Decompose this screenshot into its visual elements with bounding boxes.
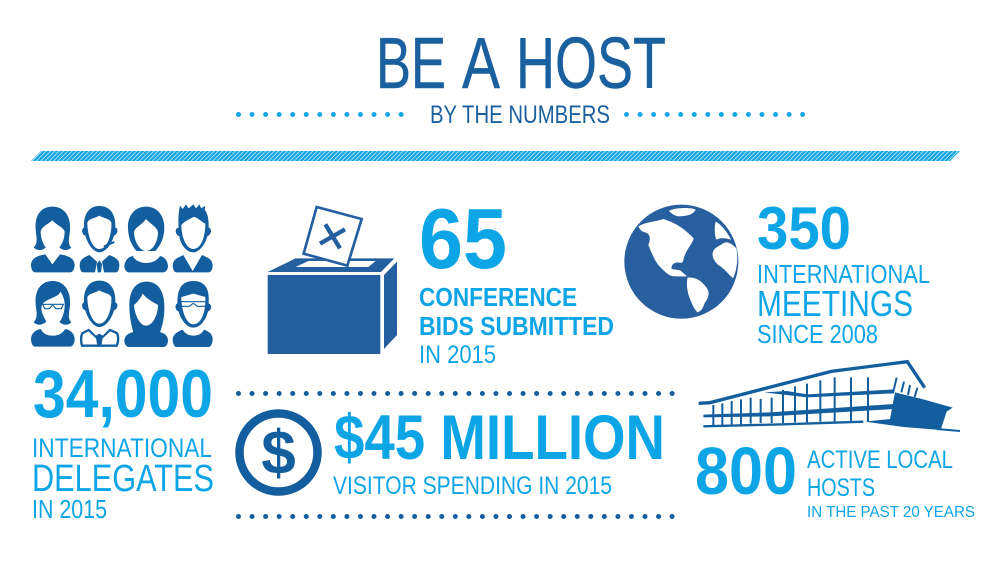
- number 34,000: 34,000: [33, 356, 213, 432]
- greenland: [669, 208, 696, 216]
- stat: visitor spending: [333, 403, 665, 500]
- slot: [296, 261, 376, 267]
- stat: 800 local hosts: [695, 434, 975, 521]
- title: HOST: [516, 24, 666, 104]
- ballot paper: [304, 207, 362, 266]
- person 2 with headset: [80, 206, 119, 272]
- label: VISITOR SPENDING IN 2015: [333, 472, 612, 500]
- globe disc: [624, 205, 738, 319]
- europe: [715, 222, 731, 240]
- icon: convention building: [699, 362, 960, 431]
- coin ring: [240, 414, 318, 492]
- lower floor line: [703, 422, 863, 426]
- box front: [268, 275, 380, 354]
- box side: [384, 262, 397, 349]
- north america: [638, 219, 694, 276]
- label: BIDS SUBMITTED: [419, 311, 614, 341]
- subtitle: BY THE NUMBERS: [430, 101, 610, 129]
- label: ACTIVE LOCAL: [807, 446, 953, 474]
- label: MEETINGS: [757, 283, 913, 324]
- middle floor band: [703, 404, 894, 417]
- label: INTERNATIONAL: [757, 259, 930, 289]
- label: SINCE 2008: [757, 319, 878, 349]
- person 6 with collar and tie: [81, 281, 118, 347]
- stat: 34,000 delegates: [32, 356, 214, 524]
- person 8 with glasses: [173, 281, 213, 347]
- icon: eight people: [31, 204, 213, 347]
- label: IN 2015: [32, 494, 107, 524]
- icon: globe: [624, 205, 738, 319]
- number 800: 800: [695, 434, 797, 509]
- label: CONFERENCE: [419, 282, 577, 312]
- person 7 with long hair: [124, 282, 168, 347]
- icon: dollar coin: [240, 414, 318, 492]
- label: IN THE PAST 20 YEARS: [807, 504, 975, 521]
- striped divider: [31, 151, 960, 161]
- stat: 350 meetings: [757, 195, 930, 349]
- icon: ballot box: [268, 207, 397, 354]
- title: BE: [376, 24, 446, 104]
- number 350: 350: [757, 195, 851, 262]
- number 65: 65: [419, 192, 507, 287]
- south america: [687, 278, 709, 312]
- title: A: [462, 24, 500, 104]
- person 1: [31, 207, 75, 272]
- stat: 65 conference bids: [419, 192, 614, 369]
- x mark: [320, 224, 345, 248]
- africa: [713, 242, 737, 278]
- subtitle dots right: [626, 112, 803, 117]
- columns: [713, 377, 917, 426]
- ground line: [937, 429, 960, 431]
- dollar sign: $: [261, 419, 296, 488]
- person 5 with glasses: [31, 281, 75, 347]
- box top: [268, 258, 394, 272]
- building solid end: [865, 392, 953, 430]
- subtitle dots left: [238, 112, 405, 117]
- person 3: [124, 207, 168, 272]
- label: DELEGATES: [32, 458, 214, 500]
- dotted rule bottom: [238, 514, 676, 519]
- label: IN 2015: [419, 341, 496, 369]
- label: INTERNATIONAL: [32, 433, 212, 463]
- number $45 million: $45 MILLION: [334, 403, 665, 473]
- person 4 with spiky hair: [173, 204, 213, 272]
- title: [376, 24, 666, 104]
- label: HOSTS: [807, 474, 875, 502]
- dotted rule top: [238, 391, 676, 396]
- upper floor band: [764, 389, 894, 397]
- roof line: [699, 362, 925, 403]
